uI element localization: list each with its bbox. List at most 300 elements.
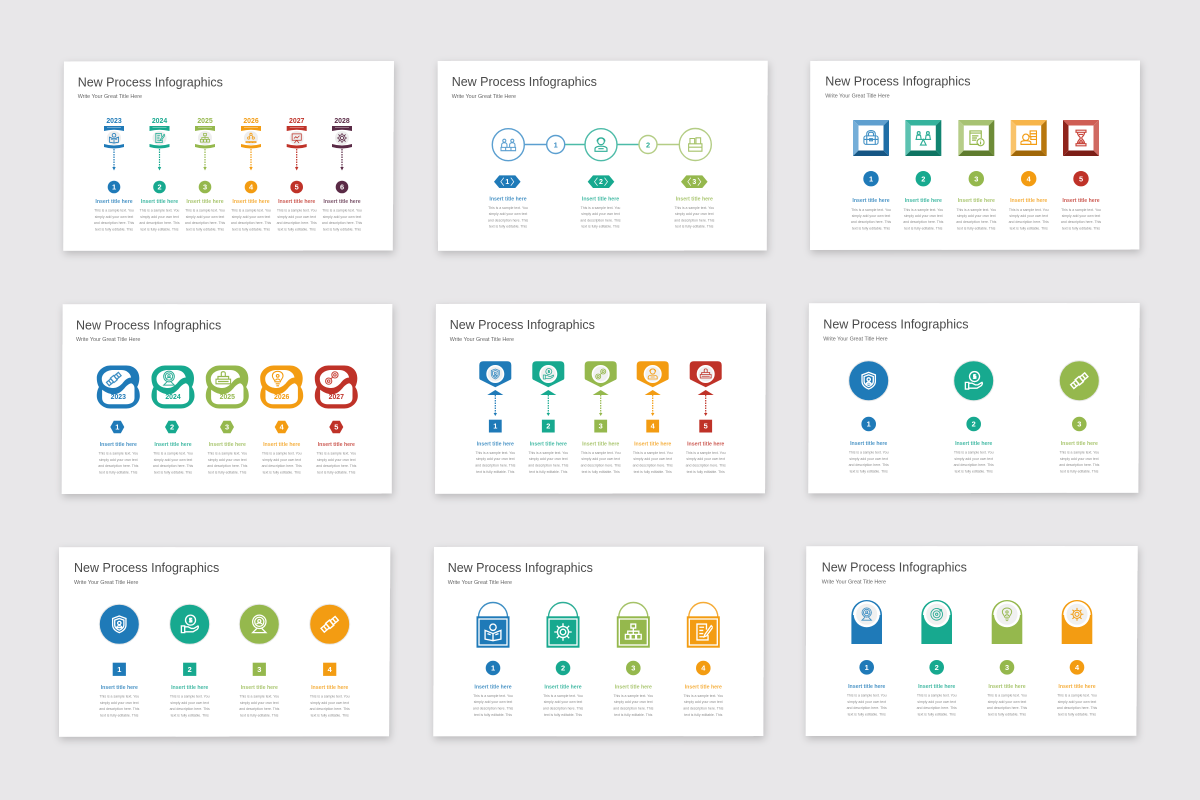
body text: simply add your own text	[277, 215, 316, 219]
column 4	[633, 361, 673, 474]
body text: and description here. This	[580, 218, 621, 222]
item title: Insert title here	[955, 441, 992, 447]
body text: simply add your own text	[684, 700, 723, 704]
column 2027	[277, 118, 317, 231]
bevel frame	[905, 120, 941, 156]
body text: simply add your own text	[917, 700, 956, 704]
heading: New Process Infographics	[452, 75, 597, 89]
body text: text is fully editable. This	[848, 712, 886, 716]
item title: Insert title here	[100, 442, 137, 448]
slide card 6	[808, 303, 1140, 493]
body text: simply add your own text	[208, 458, 247, 462]
year: 2023	[106, 118, 122, 125]
item title: Insert title here	[474, 684, 512, 690]
item title: Insert title here	[918, 684, 955, 690]
year: 2025	[197, 118, 213, 125]
heading: New Process Infographics	[823, 318, 969, 332]
column 2	[580, 175, 621, 229]
icon circle	[99, 604, 139, 644]
slide card 4	[62, 304, 392, 494]
body text: simply add your own text	[474, 700, 512, 704]
body text: This is a sample text. You	[987, 694, 1027, 698]
figure-eight badge: 2026	[274, 394, 290, 401]
item title: Insert title here	[477, 441, 514, 447]
icon circle	[310, 604, 350, 644]
body text: and description here. This	[851, 220, 891, 224]
body text: text is fully editable. This	[208, 470, 247, 474]
body text: This is a sample text. You	[956, 208, 996, 212]
number: 1	[867, 420, 871, 429]
body text: text is fully editable. This	[581, 225, 620, 229]
body text: This is a sample text. You	[543, 694, 583, 698]
padlock	[476, 602, 510, 648]
column 2026	[260, 366, 303, 474]
number: 4	[249, 183, 254, 192]
body text: and description here. This	[170, 707, 210, 711]
icon circle	[849, 361, 889, 401]
item title: Insert title here	[685, 684, 722, 690]
column 1	[849, 361, 889, 473]
item title: Insert title here	[852, 198, 890, 204]
subtitle: Write Your Great Title Here	[452, 94, 516, 100]
body text: simply add your own text	[633, 457, 672, 461]
slide thumbnails	[59, 60, 1140, 737]
body text: This is a sample text. You	[1057, 694, 1097, 698]
body text: and description here. This	[849, 463, 889, 467]
body text: and description here. This	[1057, 706, 1097, 710]
body text: and description here. This	[231, 221, 271, 225]
column 1	[99, 604, 140, 717]
number: 1	[869, 174, 873, 183]
big circle 2	[585, 129, 617, 161]
body text: and description here. This	[322, 221, 362, 225]
body text: simply add your own text	[988, 700, 1026, 704]
subtitle: Write Your Great Title Here	[78, 94, 142, 100]
arched tab	[921, 600, 952, 644]
body text: text is fully editable. This	[186, 227, 224, 231]
panel: slide 5 map pins	[435, 304, 766, 494]
hexagon number: 4	[280, 423, 285, 432]
body text: and description here. This	[674, 218, 715, 222]
column 3	[1059, 361, 1100, 473]
body text: text is fully editable. This	[489, 225, 527, 229]
column 2	[954, 361, 994, 473]
body text: text is fully editable. This	[614, 713, 653, 717]
year: 2027	[289, 118, 305, 125]
number: 4	[1075, 663, 1080, 672]
body text: and description here. This	[239, 707, 280, 711]
body text: simply add your own text	[154, 458, 192, 462]
body text: text is fully editable. This	[263, 470, 301, 474]
bevel frame	[1011, 120, 1047, 156]
year: 2024	[152, 118, 167, 125]
body text: This is a sample text. You	[849, 450, 889, 454]
body text: and description here. This	[987, 706, 1027, 710]
body text: This is a sample text. You	[473, 694, 513, 698]
item title: Insert title here	[95, 199, 133, 205]
body text: simply add your own text	[954, 457, 993, 461]
padlock	[546, 602, 580, 648]
body text: and description here. This	[917, 706, 957, 710]
hexagon number: 3	[225, 423, 229, 432]
pin marker	[585, 361, 617, 416]
square number: 4	[328, 665, 333, 674]
body text: simply add your own text	[232, 215, 270, 219]
body text: text is fully editable. This	[99, 470, 138, 474]
body text: simply add your own text	[140, 215, 179, 219]
body text: text is fully editable. This	[240, 713, 279, 717]
body text: This is a sample text. You	[185, 208, 225, 212]
panel: slide 2 linked circles	[438, 61, 768, 251]
heading: New Process Infographics	[822, 560, 967, 574]
padlock	[617, 602, 650, 648]
body text: and description here. This	[954, 463, 994, 467]
square number: 2	[188, 665, 192, 674]
heading: New Process Infographics	[76, 318, 221, 332]
square number: 5	[704, 422, 708, 431]
item title: Insert title here	[323, 199, 361, 205]
year: 2026	[243, 118, 259, 125]
body text: text is fully editable. This	[634, 470, 672, 474]
subtitle: Write Your Great Title Here	[448, 580, 512, 586]
body text: simply add your own text	[476, 457, 515, 461]
pin marker	[287, 126, 307, 170]
column 1	[847, 600, 887, 716]
small circle 2: 2	[646, 140, 650, 149]
body text: This is a sample text. You	[170, 694, 210, 698]
body text: text is fully editable. This	[1058, 712, 1096, 716]
square number: 1	[117, 665, 121, 674]
body text: text is fully editable. This	[1010, 226, 1048, 230]
column 2	[903, 120, 944, 230]
bevel frame	[958, 120, 994, 156]
panel: slide 1 timeline pins	[63, 61, 394, 251]
subtitle: Write Your Great Title Here	[76, 337, 140, 343]
body text: and description here. This	[153, 464, 193, 468]
pin marker	[532, 361, 564, 416]
body text: and description here. This	[94, 221, 134, 225]
figure-eight badge: 2025	[220, 394, 235, 401]
body text: and description here. This	[475, 463, 516, 467]
number: 3	[974, 174, 978, 183]
body text: and description here. This	[262, 464, 302, 468]
body text: and description here. This	[488, 218, 528, 222]
body text: This is a sample text. You	[207, 452, 247, 456]
body text: and description here. This	[581, 463, 621, 467]
item title: Insert title here	[1061, 441, 1098, 447]
body text: text is fully editable. This	[918, 712, 956, 716]
column 3	[239, 604, 280, 717]
padlock	[687, 602, 720, 648]
body text: simply add your own text	[240, 701, 279, 705]
body text: This is a sample text. You	[903, 208, 943, 212]
item title: Insert title here	[489, 197, 527, 203]
body text: text is fully editable. This	[687, 470, 725, 474]
bevel frame	[1063, 120, 1099, 156]
body text: This is a sample text. You	[528, 451, 568, 455]
chevron number: 3	[692, 179, 696, 186]
body text: This is a sample text. You	[98, 452, 138, 456]
number: 5	[1079, 174, 1083, 183]
body text: This is a sample text. You	[488, 206, 528, 210]
body text: simply add your own text	[904, 214, 943, 218]
body text: simply add your own text	[489, 212, 527, 216]
item title: Insert title here	[101, 685, 138, 691]
body text: simply add your own text	[186, 215, 224, 219]
body text: This is a sample text. You	[277, 208, 317, 212]
item title: Insert title here	[958, 198, 995, 204]
column 2025	[185, 118, 225, 231]
number: 2	[935, 663, 939, 672]
item title: Insert title here	[232, 199, 270, 205]
body text: This is a sample text. You	[316, 452, 356, 456]
body text: This is a sample text. You	[310, 694, 350, 698]
item title: Insert title here	[209, 442, 246, 448]
panel: slide 4 figure-eight badges	[62, 304, 392, 494]
body text: text is fully editable. This	[1062, 226, 1100, 230]
column 1	[851, 120, 891, 230]
hexagon number: 1	[115, 423, 119, 432]
item title: Insert title here	[848, 684, 885, 690]
column 1	[473, 602, 513, 717]
item title: Insert title here	[1062, 198, 1100, 204]
body text: simply add your own text	[675, 212, 714, 216]
chevron number: 2	[599, 179, 603, 186]
heading: New Process Infographics	[450, 318, 595, 332]
body text: text is fully editable. This	[684, 713, 723, 717]
column 3	[674, 175, 715, 229]
body text: text is fully editable. This	[100, 713, 139, 717]
body text: This is a sample text. You	[581, 451, 621, 455]
body text: text is fully editable. This	[474, 713, 512, 717]
icon circle	[239, 604, 279, 644]
body text: This is a sample text. You	[954, 450, 994, 454]
number: 3	[631, 664, 635, 673]
figure-eight badge: 2023	[111, 394, 126, 401]
arched tab	[851, 600, 882, 644]
big circle 1	[492, 129, 524, 161]
heading: New Process Infographics	[825, 74, 971, 88]
column 2	[170, 604, 210, 717]
number: 2	[921, 174, 925, 183]
small circle 1	[547, 136, 565, 154]
linked circle chain	[492, 128, 711, 161]
column 2	[917, 600, 957, 716]
body text: text is fully editable. This	[544, 713, 582, 717]
body text: text is fully editable. This	[850, 469, 888, 473]
body text: and description here. This	[1061, 220, 1101, 224]
item title: Insert title here	[171, 685, 208, 691]
body text: simply add your own text	[310, 701, 349, 705]
item title: Insert title here	[318, 442, 355, 448]
item title: Insert title here	[687, 441, 724, 447]
hexagon number: 2	[170, 423, 174, 432]
body text: simply add your own text	[686, 457, 725, 461]
body text: simply add your own text	[581, 212, 620, 216]
column 3	[581, 361, 621, 474]
slide card 2	[438, 61, 768, 251]
big circle 3	[679, 128, 711, 160]
number: 2	[561, 664, 565, 673]
small circle 2	[639, 136, 657, 154]
body text: This is a sample text. You	[475, 451, 515, 455]
column 4	[1057, 600, 1097, 716]
item title: Insert title here	[241, 685, 278, 691]
item title: Insert title here	[278, 199, 315, 205]
number: 1	[112, 183, 116, 192]
item title: Insert title here	[154, 442, 192, 448]
body text: This is a sample text. You	[683, 694, 723, 698]
heading: New Process Infographics	[448, 561, 593, 575]
pin marker	[104, 126, 124, 170]
body text: simply add your own text	[323, 215, 361, 219]
body text: and description here. This	[98, 464, 139, 468]
number: 4	[1027, 174, 1032, 183]
body text: text is fully editable. This	[582, 470, 620, 474]
body text: text is fully editable. This	[1060, 469, 1099, 473]
body text: text is fully editable. This	[154, 470, 192, 474]
figure-eight badge: 2027	[329, 394, 344, 401]
column 4	[683, 602, 724, 717]
body text: This is a sample text. You	[917, 694, 957, 698]
body text: text is fully editable. This	[476, 470, 515, 474]
item title: Insert title here	[311, 685, 348, 691]
column 3	[987, 600, 1027, 716]
body text: and description here. This	[686, 463, 726, 467]
body text: text is fully editable. This	[140, 227, 179, 231]
body text: and description here. This	[847, 706, 887, 710]
number: 1	[865, 663, 869, 672]
column 2026	[231, 118, 271, 231]
body text: This is a sample text. You	[613, 694, 653, 698]
number: 2	[972, 420, 976, 429]
column 2023	[94, 118, 134, 231]
body text: and description here. This	[528, 463, 569, 467]
body text: This is a sample text. You	[581, 206, 620, 210]
subtitle: Write Your Great Title Here	[74, 580, 138, 586]
body text: text is fully editable. This	[957, 226, 996, 230]
body text: This is a sample text. You	[1059, 450, 1099, 454]
body text: and description here. This	[473, 707, 513, 711]
number: 4	[701, 664, 706, 673]
body text: simply add your own text	[1060, 457, 1099, 461]
body text: simply add your own text	[529, 457, 568, 461]
body text: This is a sample text. You	[231, 208, 271, 212]
item title: Insert title here	[263, 442, 300, 448]
body text: This is a sample text. You	[153, 452, 193, 456]
body text: simply add your own text	[99, 458, 138, 462]
number: 3	[203, 183, 207, 192]
item title: Insert title here	[1058, 684, 1096, 690]
item title: Insert title here	[530, 441, 567, 447]
body text: text is fully editable. This	[988, 712, 1026, 716]
panel: slide 7 four circles	[59, 547, 390, 737]
square number: 3	[599, 422, 603, 431]
body text: text is fully editable. This	[171, 713, 209, 717]
body text: and description here. This	[310, 707, 350, 711]
pin marker	[479, 361, 511, 416]
column 2	[543, 602, 583, 717]
number: 5	[295, 183, 299, 192]
arched tab	[992, 600, 1022, 644]
subtitle: Write Your Great Title Here	[823, 336, 888, 342]
subtitle: Write Your Great Title Here	[450, 337, 514, 343]
item title: Insert title here	[544, 684, 582, 690]
pin marker	[332, 126, 352, 170]
column 2024	[152, 366, 194, 474]
icon circle	[954, 361, 994, 401]
item title: Insert title here	[1010, 198, 1047, 204]
body text: and description here. This	[1009, 220, 1049, 224]
column 2025	[206, 366, 249, 474]
item title: Insert title here	[850, 441, 887, 447]
body text: text is fully editable. This	[852, 226, 890, 230]
body text: This is a sample text. You	[686, 451, 726, 455]
body text: simply add your own text	[95, 215, 133, 219]
body text: and description here. This	[956, 220, 997, 224]
body text: and description here. This	[613, 707, 654, 711]
body text: text is fully editable. This	[323, 227, 361, 231]
body text: text is fully editable. This	[232, 227, 270, 231]
body text: This is a sample text. You	[847, 694, 887, 698]
pin marker	[150, 126, 170, 170]
chevron number: 1	[505, 179, 509, 186]
body text: simply add your own text	[1009, 214, 1048, 218]
body text: This is a sample text. You	[1009, 208, 1049, 212]
body text: text is fully editable. This	[529, 470, 568, 474]
slide card 5	[435, 304, 766, 494]
item title: Insert title here	[676, 197, 713, 203]
number: 1	[491, 664, 495, 673]
body text: simply add your own text	[581, 457, 620, 461]
body text: and description here. This	[185, 221, 225, 225]
body text: simply add your own text	[1058, 700, 1096, 704]
body text: This is a sample text. You	[239, 694, 279, 698]
subtitle: Write Your Great Title Here	[822, 580, 886, 586]
slide card 3	[810, 60, 1140, 250]
body text: simply add your own text	[262, 458, 301, 462]
panel: slide 9 arched tabs	[806, 546, 1138, 736]
body text: text is fully editable. This	[278, 227, 316, 231]
figure-eight badge: 2024	[165, 394, 181, 401]
column 2027	[315, 366, 358, 474]
heading: New Process Infographics	[74, 561, 219, 575]
item title: Insert title here	[186, 199, 224, 205]
body text: simply add your own text	[847, 700, 886, 704]
body text: text is fully editable. This	[317, 470, 356, 474]
slide card 8	[433, 547, 764, 736]
body text: and description here. This	[277, 221, 317, 225]
body text: and description here. This	[139, 221, 180, 225]
number: 2	[157, 183, 162, 192]
body text: This is a sample text. You	[140, 208, 179, 212]
number: 3	[1077, 420, 1081, 429]
icon circle	[1059, 361, 1099, 401]
column 3	[613, 602, 654, 717]
column 1	[488, 175, 528, 229]
body text: simply add your own text	[544, 700, 582, 704]
slide card 1	[63, 61, 394, 251]
item title: Insert title here	[582, 441, 619, 447]
column 2023	[97, 366, 140, 474]
body text: text is fully editable. This	[95, 227, 133, 231]
body text: simply add your own text	[614, 700, 653, 704]
body text: text is fully editable. This	[675, 225, 714, 229]
body text: and description here. This	[903, 220, 944, 224]
heading: New Process Infographics	[78, 75, 223, 89]
column 2028	[322, 118, 362, 231]
body text: simply add your own text	[1062, 214, 1100, 218]
